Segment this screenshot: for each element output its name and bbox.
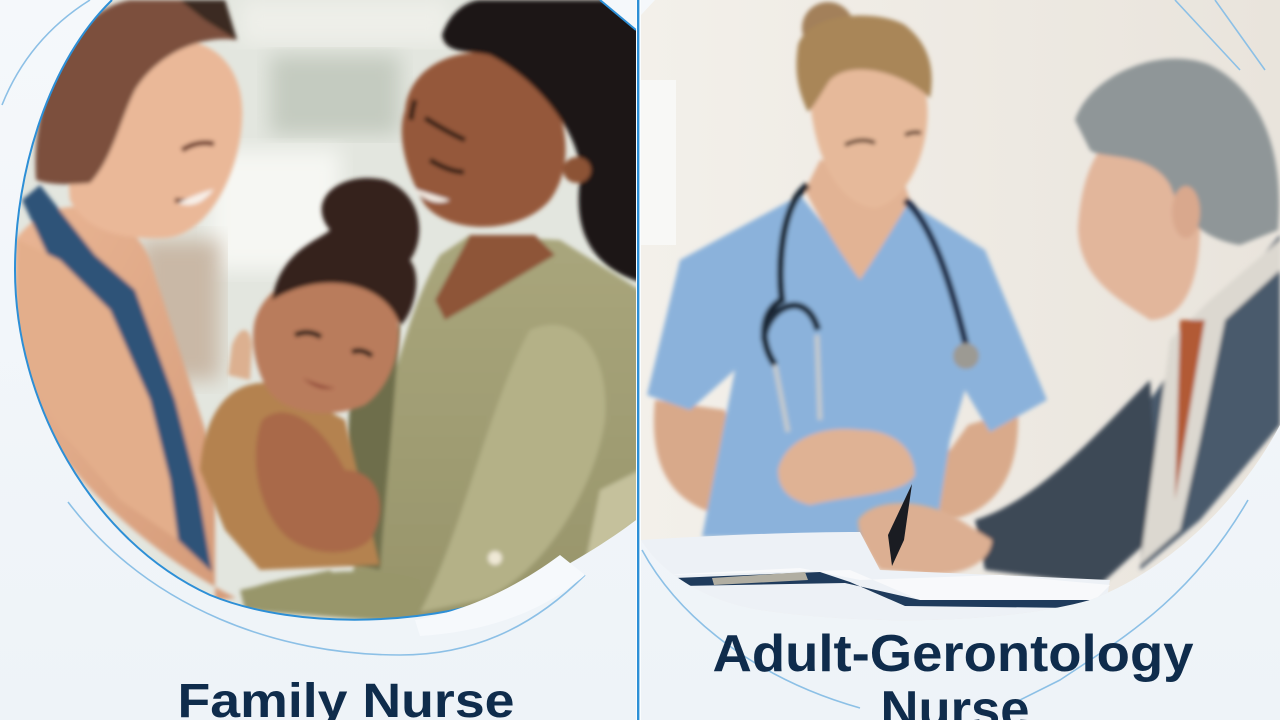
- clinic wall: [640, 0, 1280, 640]
- decorative arcs: gerontology nurse: [642, 0, 1265, 708]
- baby: [200, 178, 419, 570]
- ellipse edge: family nurse: [15, 0, 636, 620]
- heading: adult-gerontology nurse: [712, 625, 1194, 720]
- older woman: [858, 59, 1280, 585]
- panel: adult-gerontology nurse photo: [640, 0, 1280, 640]
- decorative arcs: family nurse: [2, 0, 585, 655]
- left mother: [15, 0, 242, 600]
- white band under the photos: [415, 555, 585, 636]
- blurred room background: [0, 0, 640, 640]
- nurse: [647, 2, 1047, 537]
- panel divider: [636, 0, 641, 720]
- panel: family nurse photo: [0, 0, 640, 640]
- heading: adult-gerontology nurse: Adult-Gerontology: [712, 625, 1194, 683]
- right mother: [240, 0, 640, 625]
- desk and clipboard: [642, 484, 1110, 620]
